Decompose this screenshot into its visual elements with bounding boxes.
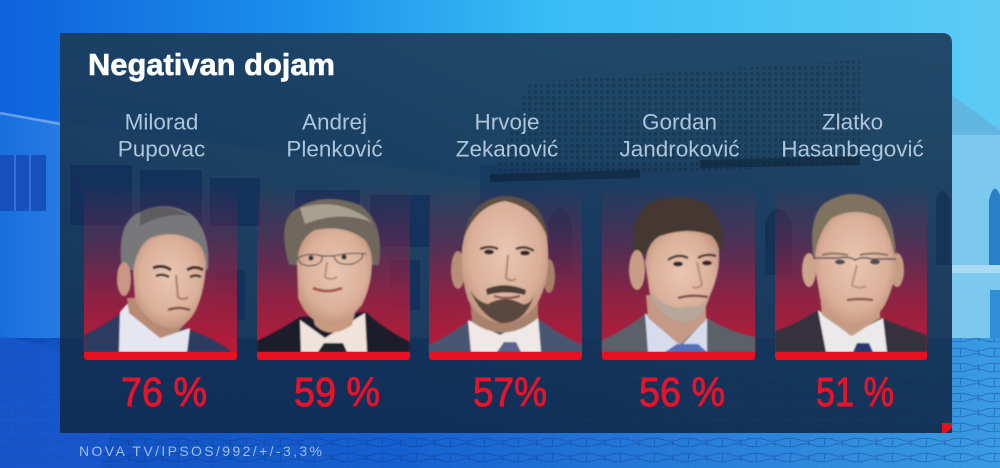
name: Andrej xyxy=(302,110,367,134)
name: Milorad xyxy=(125,110,198,134)
candidate 4: Gordan Jandroković xyxy=(602,110,755,415)
candidate 1: Milorad Pupovac xyxy=(84,110,237,415)
red bar xyxy=(257,352,410,360)
source note: NOVA TV/IPSOS/992/+/-3,3% xyxy=(79,443,322,459)
value: 76 % xyxy=(121,369,207,415)
portrait xyxy=(84,206,232,352)
photo background xyxy=(84,190,237,352)
portrait xyxy=(257,199,410,352)
title: Negativan dojam xyxy=(88,48,335,82)
value: 57% xyxy=(473,369,547,415)
portrait xyxy=(775,194,927,352)
name: Pupovac xyxy=(118,136,205,162)
name: Hasanbegović xyxy=(781,136,924,162)
red bar xyxy=(429,352,582,360)
photo background xyxy=(775,190,927,352)
name: Zekanović xyxy=(456,136,558,162)
name: Zlatko xyxy=(822,110,883,134)
portrait xyxy=(602,197,755,352)
portrait xyxy=(429,196,582,352)
name: Gordan xyxy=(642,110,717,134)
photo background xyxy=(429,190,582,352)
backdrop inside panel: building seen through xyxy=(70,60,950,325)
value: 51 % xyxy=(816,369,894,415)
photo background xyxy=(602,190,755,352)
accent: red panel corner xyxy=(942,423,952,433)
red bar xyxy=(775,352,927,360)
photo background xyxy=(257,190,410,352)
candidate 5: Zlatko Hasanbegović xyxy=(775,110,927,415)
red bar xyxy=(84,352,237,360)
value: 56 % xyxy=(639,369,725,415)
panel: dark overlay xyxy=(60,33,952,433)
name: Plenković xyxy=(286,136,383,162)
name: Hrvoje xyxy=(474,110,540,134)
red bar xyxy=(602,352,755,360)
candidate 2: Andrej Plenković xyxy=(257,110,410,415)
name: Jandroković xyxy=(619,136,740,162)
value: 59 % xyxy=(294,369,380,415)
candidate 3: Hrvoje Zekanović xyxy=(429,110,582,415)
